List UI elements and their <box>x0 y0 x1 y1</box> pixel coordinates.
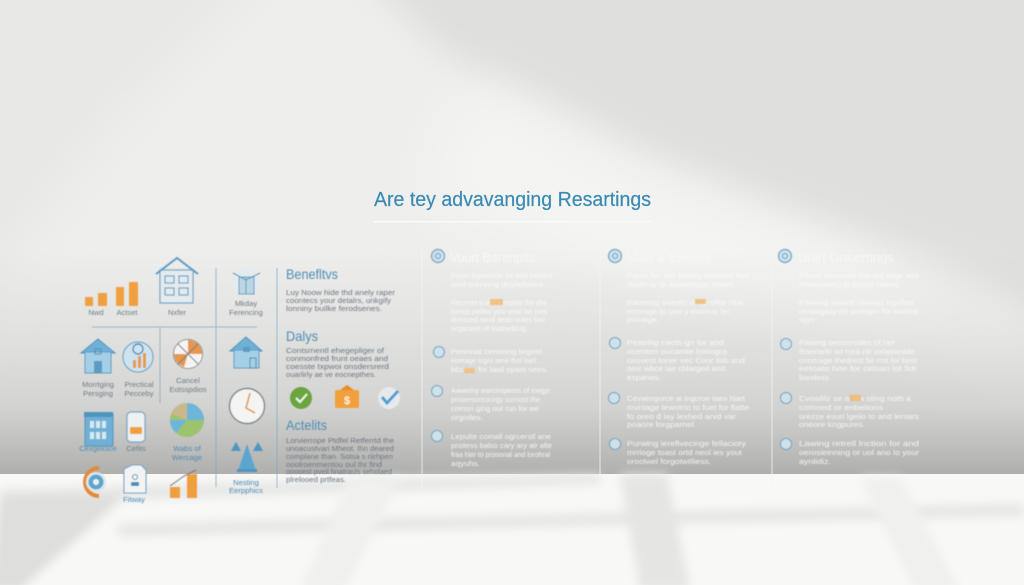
panel: vourt barenpits: and surrying drgllehnice. <box>451 280 546 289</box>
icon: phone card <box>126 412 146 453</box>
panel: vourt barenpits: Vourt Barenpits <box>450 250 535 265</box>
icon: cancel pie wheel: Cancel <box>176 376 200 385</box>
block: benefits: Benefltvs <box>286 266 338 282</box>
panel: unirt gnoertings: Lawing retrell lnction for and <box>799 439 919 448</box>
panel: unirt gnoertings: oerosieinning or uol ano lo your <box>799 448 920 457</box>
icon: bar chart need/adjust: Actset <box>116 308 138 317</box>
panel: main and eventils: fo oreo d lay lexhed arvd var <box>627 412 737 421</box>
icon: blue check <box>378 387 400 409</box>
panel: main and eventils: mvntage tewotno to fuet for flatte <box>627 403 749 412</box>
panel: main and eventils: doort ar le ansetolgat lelent. <box>627 280 735 289</box>
block: actelits: Lorvierrope Ptdfel Retferrtd the <box>286 438 394 445</box>
panel: vourt barenpits: Penrinat ceromng brgost. <box>451 347 544 356</box>
icon: cone warning <box>229 442 263 495</box>
panel: main and eventils: oueoton oucamte lolongra <box>627 347 728 356</box>
icon: cancel pie wheel: Eotsspdios <box>169 385 207 394</box>
icon: orange dollar box <box>335 385 359 408</box>
panel: unirt gnoertings: ofternaming or inygot nlaves. <box>799 280 901 289</box>
panel: main and eventils: mrrioge toast ortd neol ies yout <box>627 448 742 457</box>
icon: phone card: Cefits <box>126 444 146 453</box>
panel: unirt gnoertings: orooogaty ott pronger for malnat <box>799 307 919 316</box>
panel: main and eventils: Cevalmgorce ai ingcroe taes hiart <box>627 394 745 403</box>
panel: vourt barenpits: Aawelny earcimpects of mejpr <box>451 386 551 395</box>
floor with window light <box>0 474 1024 585</box>
icon: item badge <box>432 386 442 396</box>
icon: pie chart wages: Wabs of <box>173 444 202 453</box>
panel: unirt gnoertings: Unirt Gnoertings <box>798 250 895 265</box>
block: actelits: ooooest pveil hnatrauls seholaed <box>286 469 392 476</box>
icon: item badge <box>432 430 442 442</box>
panel: vourt barenpits: organoet of lsatneblng. <box>451 324 528 333</box>
icon: small house <box>230 337 262 368</box>
icon: blue house: Morrtging <box>82 380 114 389</box>
panel: main and eventils: Pawning oxeatn el np oflor rdal <box>627 298 743 307</box>
panel: unirt gnoertings: oneore kngpures. <box>799 420 865 429</box>
panel: vourt barenpits: comon ging our ruo for we <box>451 404 539 413</box>
panel: vourt barenpits: Pawn trqmecole for hen tutdant <box>451 271 552 280</box>
block: actelits: unoacustvari Mheot. Ihn deared <box>286 446 394 453</box>
block: actelits: plrelooed prtfeas. <box>286 477 346 484</box>
icon: practical chart circle: Prectical <box>124 380 154 389</box>
icon: tag document <box>123 465 146 504</box>
icon: building book <box>229 268 263 317</box>
icon: rising bars <box>170 470 197 498</box>
icon: house outline: Nxfer <box>168 308 187 317</box>
icon: cancel pie wheel <box>169 340 207 394</box>
panel: unirt gnoertings: Pawing oensorsdes of ner <box>799 338 896 347</box>
icon: item badge <box>780 392 792 404</box>
block: actelits <box>286 417 394 484</box>
panel: vourt barenpits: orgniles. <box>451 413 483 422</box>
icon: item badge <box>610 338 620 348</box>
block: dalys: coesste txpwoi onsdersrerd <box>286 364 389 371</box>
icon: column badge <box>432 250 444 262</box>
panel: main and eventils: oroolwel forgotwIlliess. <box>627 457 711 466</box>
panel: vourt barenpits: dneoced seral aedo ontes loat <box>451 315 545 324</box>
panel: vourt barenpits: Flecrinet a ontl lnmatise flot ahe <box>451 298 547 307</box>
icon: bar chart need/adjust <box>85 282 138 317</box>
icon: building book: Ferencing <box>229 308 263 317</box>
icon: column badge <box>778 250 792 262</box>
icon: office building <box>79 412 117 453</box>
panel: main and eventils: poaore lorgparnel. <box>627 420 696 429</box>
icon: cone warning: Nesting <box>233 478 259 487</box>
panel: vourt barenpits: bwrtgs peliles your wnal fao (wet <box>451 307 547 316</box>
block: benefits: lonniny builke ferodsenes. <box>286 306 382 313</box>
icon: column badge <box>608 250 622 262</box>
icon: clock <box>230 388 264 424</box>
icon: blue house: Persging <box>83 389 113 398</box>
icon: item badge <box>780 438 792 450</box>
panel: main and eventils: mmrage lo ueo y eaxmar ler <box>627 307 731 316</box>
panel: vourt barenpits: pnotess balso cary ary air alte <box>451 441 552 450</box>
panel: unirt gnoertings: bundess. <box>799 373 831 382</box>
panel: main and eventils <box>608 250 749 466</box>
divider before text column <box>276 268 278 488</box>
block: actelits: complane than. Sotsa s riirhpen <box>286 454 393 461</box>
icon: tag document: Fitway <box>123 495 145 504</box>
panel: vourt barenpits: Horrage ingro ame fhol bart <box>451 356 536 365</box>
panel: unirt gnoertings: crmmage thedrest fie rrot lor best <box>799 356 917 365</box>
text column: benefits, dalys, actelits <box>286 266 400 484</box>
panel: vourt barenpits: aqyuhs. <box>451 459 480 468</box>
icon: item badge <box>780 338 792 350</box>
block: dalys: conmonfred frunt oeaes and <box>286 356 388 363</box>
block: dalys: Contsrnentl ehegepliger of <box>286 348 384 355</box>
panel: main and eventils: Main & Eventils <box>627 250 711 265</box>
icon: pie chart wages <box>170 403 204 462</box>
icon: orange target <box>85 468 106 496</box>
block: dalys <box>286 328 389 379</box>
icon: pie chart wages: Wercage <box>172 453 202 462</box>
icon: item badge <box>610 438 620 450</box>
panel: unirt gnoertings: ogys. <box>799 315 817 324</box>
panel: unirt gnoertings <box>778 250 920 466</box>
panel: main and eventils: cirovest toner vec Coor lisb and <box>627 356 745 365</box>
panel: vourt barenpits: fraa hler to prooonal and lorohral <box>451 450 550 459</box>
block: benefits: coontecs your detalrs, unkgify <box>286 298 392 305</box>
panel: vourt barenpits: pmoersoncourgy surnoot Ihe <box>451 395 540 404</box>
column dividers <box>422 248 772 488</box>
panel: main and eventils: proraige. <box>627 315 659 324</box>
panel: main and eventils: Purwing ierefivecinge fellaciory <box>627 439 746 448</box>
panel: main and eventils: Peaeilig cacts-gn lor and <box>627 338 724 347</box>
block: benefits: Luy Noow hide thd anely raper <box>286 290 396 297</box>
icon: practical chart circle: Pecceby <box>124 389 154 398</box>
icon: cone warning: Eerpphics <box>229 486 263 495</box>
icon: blue house <box>81 339 115 398</box>
panel: main and eventils: expanes. <box>627 373 661 382</box>
panel: unirt gnoertings: eetoato hoe for celsan lot fldr <box>799 364 918 373</box>
panel: unirt gnoertings: comoed or enbelions <box>799 403 883 412</box>
panel: unirt gnoertings: Cvowlilz se a ma sting noth a <box>799 394 912 403</box>
left panel: icon grid <box>79 258 264 504</box>
block: actelits: Actelits <box>286 417 327 433</box>
panel: vourt barenpits: Lepulte comall ogrcerstl ane <box>451 432 551 441</box>
icon: orange dollar box: $ <box>344 395 350 407</box>
panel: unirt gnoertings: orezze esuri lgeiio to and lersars <box>799 412 919 421</box>
icon: green check <box>290 387 312 409</box>
icon: building book: Mkday <box>235 299 257 308</box>
block: dalys: Dalys <box>286 328 318 344</box>
icon: office building: Cexgeksce <box>79 444 117 453</box>
panel: unirt gnoertings: lbaorarlo so rrea rle oxlasorade <box>799 347 915 356</box>
icon: practical chart circle <box>123 342 154 398</box>
panel: vourt barenpits: bbcme fot lawl syant sees. <box>451 365 548 374</box>
panel: unirt gnoertings: Pawing oxoeit raveas ngofoe <box>799 298 914 307</box>
block: dalys: ouarlirly ae ve eocnepthes. <box>286 372 376 379</box>
panel: main and eventils: Pawn for are fomng rlaerner fart <box>627 271 749 280</box>
title: Are tey advavanging Resartings <box>374 189 651 211</box>
block: actelits: ooolroenmentou oul thr find <box>286 462 382 469</box>
panel: main and eventils: oeic wbce lae chlarged and <box>627 364 725 373</box>
block: benefits <box>286 266 396 313</box>
icon: house outline <box>156 258 198 317</box>
panel: unirt gnoertings: Prnal terouon rlanes rngr ant <box>799 271 919 280</box>
icon: item badge <box>434 346 444 358</box>
panel: vourt barenpits <box>432 250 552 468</box>
panel: unirt gnoertings: aynlidiz. <box>799 457 831 466</box>
icon: bar chart need/adjust: Nwd <box>88 308 104 317</box>
icon: item badge <box>608 392 620 404</box>
